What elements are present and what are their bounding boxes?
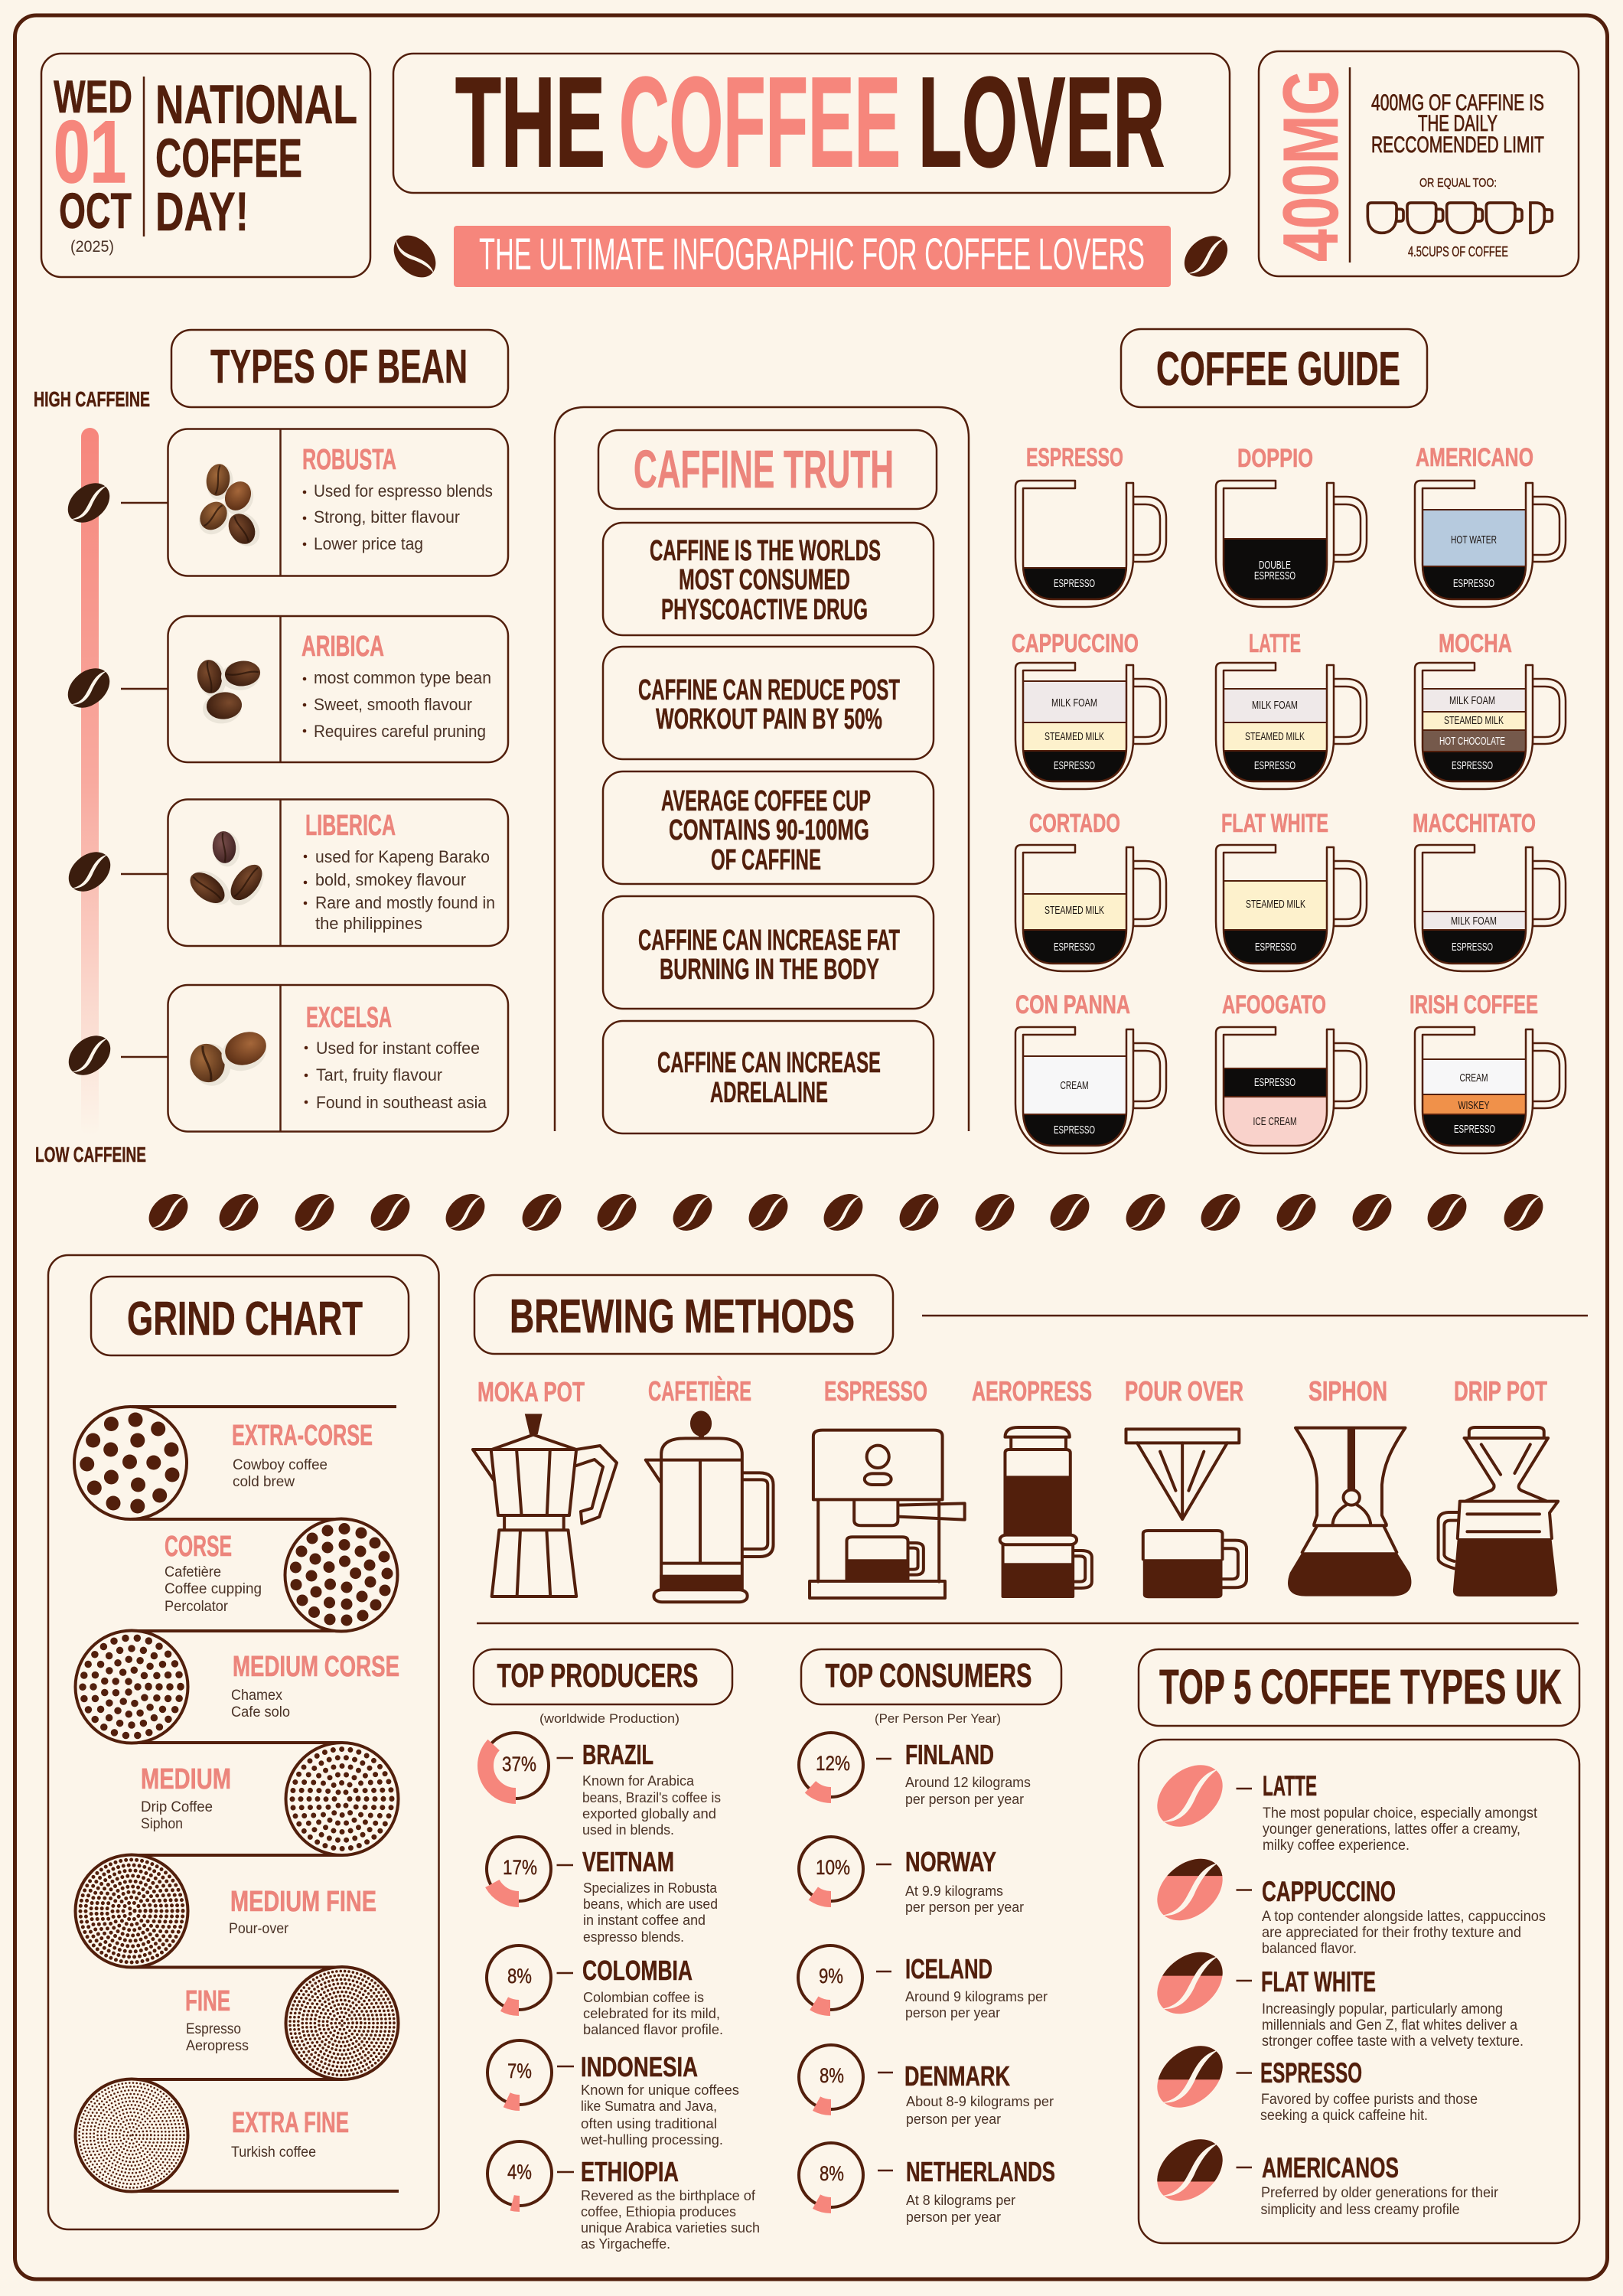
drink: cortado: ESPRESSO bbox=[1054, 941, 1095, 954]
producer: ethiopia: unique Arabica varieties such bbox=[581, 2220, 760, 2236]
grind: corse: Percolator bbox=[165, 1598, 228, 1615]
consumer: finland bbox=[799, 1733, 1031, 1807]
grind: medium: Drip Coffee bbox=[141, 1799, 213, 1815]
limit text: RECCOMENDED LIMIT bbox=[1371, 132, 1544, 158]
fact 3: OF CAFFINE bbox=[711, 844, 821, 876]
drink: mocha: STEAMED MILK bbox=[1444, 714, 1504, 727]
drink: latte: STEAMED MILK bbox=[1245, 730, 1305, 743]
fact 4: BURNING IN THE BODY bbox=[660, 954, 879, 986]
aribica facts bbox=[303, 668, 491, 741]
drink: con panna: CON PANNA bbox=[1015, 990, 1130, 1019]
grind: corse: Cafetière bbox=[165, 1564, 221, 1580]
drink: mocha: MILK FOAM bbox=[1449, 694, 1495, 707]
drink: macchiato: MACCHITATO bbox=[1413, 809, 1536, 838]
drink: irish coffee: ESPRESSO bbox=[1454, 1123, 1495, 1136]
producer: ethiopia bbox=[487, 2141, 760, 2252]
donut 7% bbox=[487, 2040, 552, 2105]
drink: affogato bbox=[1216, 990, 1367, 1153]
type: latte: The most popular choice, especially amongst bbox=[1263, 1805, 1538, 1821]
card: robusta bbox=[168, 429, 508, 576]
excelsa facts: Used for instant coffee bbox=[316, 1039, 480, 1058]
consumer: iceland bbox=[798, 1945, 1048, 2020]
panel: top 5 coffee types uk bbox=[1139, 1649, 1579, 2243]
drink: americano bbox=[1415, 443, 1566, 607]
producer: indonesia: like Sumatra and Java, bbox=[581, 2099, 717, 2114]
panel: date bbox=[41, 54, 370, 277]
fact 3 bbox=[603, 771, 934, 884]
panel: brewing methods bbox=[473, 1275, 1588, 1602]
drink: con panna: CREAM bbox=[1061, 1079, 1088, 1092]
type: flat white: stronger coffee taste with a velvety texture. bbox=[1262, 2033, 1524, 2050]
consumer: netherlands: person per year bbox=[906, 2210, 1001, 2225]
liberica facts: used for Kapeng Barako bbox=[315, 847, 490, 866]
producer: vietnam: in instant coffee and bbox=[583, 1913, 706, 1928]
card: aribica bbox=[168, 616, 508, 762]
type: latte bbox=[1146, 1753, 1538, 1854]
drink: irish coffee: IRISH COFFEE bbox=[1410, 990, 1538, 1019]
producer: brazil: used in blends. bbox=[582, 1822, 674, 1838]
aribica facts: Sweet, smooth flavour bbox=[314, 695, 472, 714]
method labels: MOKA POT bbox=[477, 1376, 585, 1407]
subtitle banner bbox=[454, 226, 1171, 287]
grind: extra-corse bbox=[74, 1407, 373, 1519]
type: cappuccino: A top contender alongside lattes, cappuccinos bbox=[1262, 1909, 1546, 1925]
drink: macchiato: MILK FOAM bbox=[1451, 915, 1497, 928]
card: excelsa bbox=[168, 985, 508, 1131]
card: aribica: ARIBICA bbox=[301, 631, 384, 663]
consumer: finland: Around 12 kilograms bbox=[905, 1775, 1031, 1790]
fact 1 bbox=[603, 523, 934, 635]
grind: medium fine bbox=[75, 1855, 376, 1967]
producer: ethiopia: as Yirgacheffe. bbox=[581, 2236, 670, 2252]
grind: medium bbox=[141, 1743, 398, 1855]
donut 12%: 12% bbox=[816, 1752, 850, 1775]
grind: medium: MEDIUM bbox=[141, 1763, 231, 1795]
grind: medium corse: Cafe solo bbox=[231, 1704, 290, 1720]
consumer: norway bbox=[799, 1837, 1024, 1915]
producers note: (worldwide Production) bbox=[539, 1711, 680, 1726]
type: espresso: Favored by coffee purists and those bbox=[1261, 2092, 1478, 2108]
drink: affogato: ESPRESSO bbox=[1254, 1076, 1295, 1089]
drink: latte: LATTE bbox=[1249, 629, 1301, 658]
consumer: norway: At 9.9 kilograms bbox=[905, 1883, 1003, 1899]
type: flat white: FLAT WHITE bbox=[1261, 1966, 1376, 1998]
method labels: AEROPRESS bbox=[972, 1375, 1092, 1407]
grind: extra-corse: EXTRA-CORSE bbox=[232, 1420, 373, 1452]
fact 2: WORKOUT PAIN BY 50% bbox=[656, 703, 882, 735]
donut 37%: 37% bbox=[502, 1753, 536, 1776]
producer: brazil bbox=[483, 1733, 721, 1838]
panel: top consumers bbox=[798, 1649, 1061, 2225]
national coffee day text: NATIONAL bbox=[155, 75, 357, 135]
heading: brewing methods bbox=[474, 1275, 893, 1354]
limit text: THE DAILY bbox=[1418, 111, 1498, 136]
type: latte: milky coffee experience. bbox=[1263, 1838, 1410, 1854]
title box bbox=[393, 51, 1230, 194]
drink: affogato: ICE CREAM bbox=[1253, 1115, 1296, 1128]
type: cappuccino: CAPPUCCINO bbox=[1262, 1876, 1396, 1907]
producer: brazil: exported globally and bbox=[582, 1806, 716, 1821]
national coffee day text: COFFEE bbox=[155, 129, 302, 189]
drink: con panna: ESPRESSO bbox=[1054, 1124, 1095, 1137]
heading: coffee guide bbox=[1121, 329, 1427, 407]
drink: americano: HOT WATER bbox=[1451, 533, 1497, 546]
drink: doppio bbox=[1216, 444, 1367, 608]
icon: espresso machine bbox=[810, 1430, 965, 1598]
drink: doppio: ESPRESSO bbox=[1254, 569, 1295, 582]
drink: irish coffee bbox=[1410, 990, 1566, 1156]
drink: con panna bbox=[1015, 990, 1166, 1156]
method labels: CAFETIÈRE bbox=[648, 1375, 751, 1407]
donut 8% bbox=[799, 2143, 863, 2207]
producer: brazil: beans, Brazil's coffee is bbox=[582, 1790, 721, 1805]
drink: mocha bbox=[1415, 629, 1566, 790]
drink: macchiato bbox=[1413, 809, 1566, 971]
fact 1: MOST CONSUMED bbox=[679, 564, 850, 596]
title: COFFEE bbox=[619, 51, 901, 194]
drink: latte: ESPRESSO bbox=[1254, 759, 1295, 772]
aribica facts: most common type bean bbox=[314, 668, 491, 687]
panel: top producers bbox=[474, 1649, 760, 2252]
fact 2: CAFFINE CAN REDUCE POST bbox=[638, 674, 900, 706]
drink: macchiato: ESPRESSO bbox=[1452, 941, 1493, 954]
producer: vietnam: espresso blends. bbox=[583, 1929, 684, 1945]
producer: vietnam: Specializes in Robusta bbox=[583, 1880, 718, 1896]
type: latte: younger generations, lattes offer a creamy, bbox=[1263, 1821, 1520, 1838]
title: THE bbox=[455, 51, 605, 194]
robusta facts bbox=[303, 481, 493, 553]
drink: cortado bbox=[1015, 809, 1166, 971]
producer: vietnam: VEITNAM bbox=[582, 1846, 674, 1877]
grind: extra-corse: Cowboy coffee bbox=[233, 1456, 328, 1473]
drink: latte bbox=[1216, 629, 1367, 789]
liberica facts: bold, smokey flavour bbox=[315, 870, 466, 889]
drink: flat white: ESPRESSO bbox=[1255, 941, 1296, 954]
donut 8% bbox=[487, 1945, 551, 2010]
grind: fine: Aeropress bbox=[186, 2037, 249, 2054]
drink: irish coffee: CREAM bbox=[1460, 1071, 1488, 1084]
type: espresso: seeking a quick caffeine hit. bbox=[1260, 2108, 1428, 2124]
method labels: SIPHON bbox=[1309, 1375, 1387, 1407]
donut 8% bbox=[799, 2045, 863, 2109]
scale beans bbox=[60, 475, 118, 1083]
date day: 01 bbox=[54, 103, 126, 201]
consumer: iceland: person per year bbox=[905, 2005, 1000, 2020]
heading: caffine truth bbox=[598, 430, 937, 509]
producer: colombia: balanced flavor profile. bbox=[583, 2022, 723, 2037]
400mg vertical label: 400MG bbox=[1267, 70, 1354, 262]
grind: medium fine: Pour-over bbox=[229, 1920, 288, 1937]
consumer: iceland: ICELAND bbox=[905, 1953, 992, 1985]
label: high caffeine: HIGH CAFFEINE bbox=[34, 387, 150, 411]
producer: brazil: BRAZIL bbox=[582, 1739, 653, 1770]
producer: indonesia: wet-hulling processing. bbox=[580, 2132, 723, 2148]
consumer: iceland: Around 9 kilograms per bbox=[905, 1989, 1048, 2004]
method labels bbox=[477, 1375, 1547, 1407]
type: americanos: simplicity and less creamy profile bbox=[1261, 2202, 1460, 2218]
producer: colombia: Colombian coffee is bbox=[583, 1990, 704, 2005]
type: flat white: millennials and Gen Z, flat whites deliver a bbox=[1262, 2017, 1517, 2033]
heading: coffee guide: COFFEE GUIDE bbox=[1156, 343, 1400, 396]
panel: grind chart bbox=[48, 1255, 439, 2229]
drink: americano: AMERICANO bbox=[1416, 443, 1533, 472]
donut 17%: 17% bbox=[503, 1856, 537, 1879]
donut 8%: 8% bbox=[820, 2064, 844, 2087]
drink: cappuccino: CAPPUCCINO bbox=[1012, 629, 1139, 658]
date weekday: WED bbox=[54, 71, 132, 122]
icon: bean right bbox=[1176, 228, 1236, 285]
excelsa facts: Found in southeast asia bbox=[316, 1093, 487, 1112]
grind: fine: Espresso bbox=[186, 2020, 241, 2037]
donut 4%: 4% bbox=[507, 2161, 532, 2183]
serpentine path bbox=[132, 1407, 399, 2191]
grind: corse: CORSE bbox=[165, 1531, 232, 1563]
grind: medium corse bbox=[75, 1630, 399, 1743]
consumer: netherlands bbox=[799, 2143, 1055, 2225]
photo: aribica beans bbox=[195, 657, 262, 725]
icon: drip pot bbox=[1439, 1427, 1558, 1596]
producer: indonesia bbox=[487, 2040, 739, 2148]
panel: 400mg limit bbox=[1259, 51, 1579, 276]
type: flat white bbox=[1157, 1952, 1523, 2049]
producer: colombia: celebrated for its mild, bbox=[583, 2006, 720, 2021]
drink: doppio: DOUBLE bbox=[1259, 559, 1291, 572]
caffeine scale bar bbox=[81, 428, 99, 1136]
heading: top consumers: TOP CONSUMERS bbox=[825, 1657, 1031, 1694]
producer: indonesia: often using traditional bbox=[581, 2116, 717, 2131]
consumer: denmark bbox=[799, 2045, 1054, 2127]
producer: vietnam bbox=[487, 1837, 718, 1945]
producer: ethiopia: coffee, Ethiopia produces bbox=[581, 2204, 736, 2219]
consumer: finland: per person per year bbox=[905, 1792, 1024, 1807]
icon: siphon bbox=[1288, 1428, 1411, 1596]
drink: espresso: ESPRESSO bbox=[1026, 443, 1123, 472]
producer: indonesia: Known for unique coffees bbox=[581, 2082, 739, 2098]
grind: medium: Siphon bbox=[141, 1815, 183, 1832]
heading: top 5 coffee types bbox=[1139, 1649, 1579, 1726]
type: cappuccino: balanced flavor. bbox=[1262, 1941, 1357, 1957]
robusta facts: Lower price tag bbox=[314, 534, 423, 553]
icon: bean left bbox=[383, 224, 446, 289]
liberica facts: Rare and mostly found in bbox=[315, 893, 495, 912]
or equal to: OR EQUAL TOO: bbox=[1419, 177, 1497, 190]
icon: moka pot bbox=[473, 1414, 617, 1596]
liberica facts bbox=[304, 847, 495, 933]
fact 3: AVERAGE COFFEE CUP bbox=[661, 785, 871, 817]
donut 12% bbox=[799, 1733, 863, 1797]
grind: fine bbox=[185, 1967, 398, 2079]
producer: brazil: Known for Arabica bbox=[582, 1773, 695, 1789]
method labels: DRIP POT bbox=[1454, 1375, 1547, 1407]
subtitle banner: THE ULTIMATE INFOGRAPHIC FOR COFFEE LOVERS bbox=[479, 230, 1145, 279]
grind: extra fine bbox=[75, 2079, 349, 2192]
heading: types of bean: TYPES OF BEAN bbox=[210, 341, 468, 393]
grind: medium corse: MEDIUM CORSE bbox=[233, 1651, 399, 1683]
heading: grind chart bbox=[91, 1277, 409, 1355]
grind: extra fine: EXTRA FINE bbox=[232, 2107, 349, 2139]
heading: top producers: TOP PRODUCERS bbox=[497, 1657, 698, 1694]
donut 9% bbox=[798, 1945, 862, 2010]
type: espresso: ESPRESSO bbox=[1260, 2057, 1362, 2089]
fact 5 bbox=[603, 1021, 934, 1133]
drink: cappuccino: STEAMED MILK bbox=[1045, 730, 1104, 743]
consumer: norway: per person per year bbox=[905, 1900, 1024, 1915]
date month: OCT bbox=[59, 182, 132, 239]
national coffee day text: DAY! bbox=[155, 182, 249, 243]
heading: top consumers bbox=[801, 1649, 1061, 1704]
grind: fine: FINE bbox=[185, 1985, 230, 2017]
consumers note: (Per Person Per Year) bbox=[875, 1711, 1001, 1726]
fact 1: CAFFINE IS THE WORLDS bbox=[650, 535, 881, 567]
drink: americano: ESPRESSO bbox=[1453, 577, 1494, 590]
drink: irish coffee: WISKEY bbox=[1458, 1099, 1489, 1112]
national coffee day text bbox=[155, 75, 357, 243]
title: LOVER bbox=[918, 51, 1165, 194]
type: flat white: Increasingly popular, particularly among bbox=[1262, 2001, 1503, 2017]
producer: colombia bbox=[487, 1945, 723, 2037]
drink: espresso bbox=[1015, 443, 1166, 607]
type: cappuccino bbox=[1157, 1858, 1546, 1953]
drink: mocha: HOT CHOCOLATE bbox=[1439, 735, 1505, 748]
card: robusta: ROBUSTA bbox=[302, 444, 396, 476]
producer: indonesia: INDONESIA bbox=[581, 2051, 698, 2082]
heading: types of bean bbox=[171, 330, 508, 407]
donut 8%: 8% bbox=[507, 1965, 532, 1988]
consumer: denmark: About 8-9 kilograms per bbox=[906, 2094, 1054, 2109]
icon: cafetiere bbox=[646, 1411, 774, 1602]
panel: types of bean bbox=[34, 330, 508, 1166]
card: excelsa: EXCELSA bbox=[306, 1002, 392, 1034]
type: latte: LATTE bbox=[1263, 1770, 1317, 1802]
consumer: finland: FINLAND bbox=[905, 1739, 994, 1770]
type: espresso bbox=[1157, 2046, 1477, 2123]
aribica facts: Requires careful pruning bbox=[314, 722, 486, 741]
method labels: POUR OVER bbox=[1125, 1375, 1243, 1407]
fact 2 bbox=[603, 647, 934, 759]
drink: mocha: MOCHA bbox=[1439, 629, 1512, 658]
drink: cappuccino: ESPRESSO bbox=[1054, 759, 1095, 772]
drink: cortado: CORTADO bbox=[1029, 809, 1120, 838]
drink: flat white: STEAMED MILK bbox=[1246, 898, 1305, 911]
donut 9%: 9% bbox=[819, 1965, 843, 1988]
drink: latte: MILK FOAM bbox=[1252, 699, 1298, 712]
grind: corse: Coffee cupping bbox=[165, 1580, 262, 1597]
producer: ethiopia: ETHIOPIA bbox=[581, 2156, 679, 2187]
drink: cappuccino bbox=[1012, 629, 1166, 789]
grind: medium fine: MEDIUM FINE bbox=[230, 1886, 376, 1918]
card: liberica: LIBERICA bbox=[305, 810, 396, 842]
donut 17% bbox=[487, 1837, 551, 1901]
donut 8%: 8% bbox=[820, 2162, 844, 2185]
robusta facts: Strong, bitter flavour bbox=[314, 507, 460, 527]
panel: coffee guide bbox=[1012, 329, 1566, 1156]
donut 37% bbox=[483, 1733, 549, 1799]
panel: caffine truth bbox=[555, 407, 969, 1133]
limit text: 400MG OF CAFFINE IS bbox=[1371, 90, 1544, 116]
grind: extra fine: Turkish coffee bbox=[231, 2144, 316, 2161]
fact 5: ADRELALINE bbox=[710, 1077, 828, 1109]
consumer: netherlands: NETHERLANDS bbox=[906, 2156, 1055, 2187]
robusta facts: Used for espresso blends bbox=[314, 481, 493, 501]
fact 3: CONTAINS 90-100MG bbox=[669, 814, 869, 846]
producer: ethiopia: Revered as the birthplace of bbox=[581, 2188, 756, 2203]
fact 4: CAFFINE CAN INCREASE FAT bbox=[638, 925, 900, 957]
grind: medium corse: Chamex bbox=[231, 1687, 282, 1704]
type: americanos: Preferred by older generations for their bbox=[1261, 2185, 1499, 2201]
producer: colombia: COLOMBIA bbox=[582, 1955, 693, 1986]
cups caption: 4.5CUPS OF COFFEE bbox=[1408, 244, 1508, 259]
grind: extra-corse: cold brew bbox=[233, 1473, 295, 1490]
heading: brewing methods: BREWING METHODS bbox=[510, 1290, 855, 1343]
donut 10%: 10% bbox=[816, 1856, 850, 1879]
heading: top producers bbox=[474, 1649, 732, 1704]
donut 7%: 7% bbox=[507, 2060, 532, 2082]
photo: robusta beans bbox=[192, 462, 266, 552]
drink: doppio: DOPPIO bbox=[1237, 444, 1313, 473]
producer: vietnam: beans, which are used bbox=[583, 1896, 718, 1912]
drink: mocha: ESPRESSO bbox=[1452, 759, 1493, 772]
photo: liberica beans bbox=[184, 830, 271, 912]
date year: (2025) bbox=[70, 238, 114, 256]
icon: pour over bbox=[1126, 1429, 1247, 1598]
fact 1: PHYSCOACTIVE DRUG bbox=[661, 594, 868, 626]
consumer: denmark: person per year bbox=[906, 2112, 1001, 2127]
method labels: ESPRESSO bbox=[824, 1375, 927, 1407]
consumer: norway: NORWAY bbox=[905, 1846, 996, 1877]
type: americanos bbox=[1157, 2139, 1498, 2217]
photo: excelsa beans bbox=[186, 1026, 272, 1091]
consumer: netherlands: At 8 kilograms per bbox=[906, 2193, 1015, 2208]
bean divider row bbox=[142, 1186, 1550, 1238]
grind: corse bbox=[165, 1518, 398, 1632]
fact 5: CAFFINE CAN INCREASE bbox=[657, 1047, 881, 1079]
type: cappuccino: are appreciated for their frothy texture and bbox=[1262, 1925, 1521, 1941]
donut 4% bbox=[487, 2141, 552, 2206]
drink: flat white bbox=[1216, 809, 1367, 971]
drink: espresso: ESPRESSO bbox=[1054, 577, 1095, 590]
card: liberica bbox=[168, 799, 508, 946]
fact 4 bbox=[603, 896, 934, 1009]
drink: flat white: FLAT WHITE bbox=[1221, 809, 1328, 838]
limit text bbox=[1371, 90, 1544, 158]
drink: affogato: AFOOGATO bbox=[1222, 990, 1326, 1019]
donut 10% bbox=[799, 1837, 863, 1901]
icon: 4.5 cups bbox=[1367, 203, 1552, 233]
drink: cortado: STEAMED MILK bbox=[1045, 904, 1104, 917]
excelsa facts bbox=[305, 1039, 487, 1112]
label: low caffeine: LOW CAFFEINE bbox=[35, 1143, 146, 1166]
heading: grind chart: GRIND CHART bbox=[127, 1293, 363, 1345]
drink: cappuccino: MILK FOAM bbox=[1051, 696, 1097, 709]
type: americanos: AMERICANOS bbox=[1262, 2152, 1399, 2183]
consumer: denmark: DENMARK bbox=[904, 2060, 1010, 2092]
liberica facts: the philippines bbox=[315, 914, 422, 933]
heading: caffine truth: CAFFINE TRUTH bbox=[634, 439, 894, 499]
icon: aeropress bbox=[1000, 1427, 1092, 1596]
excelsa facts: Tart, fruity flavour bbox=[316, 1065, 442, 1084]
